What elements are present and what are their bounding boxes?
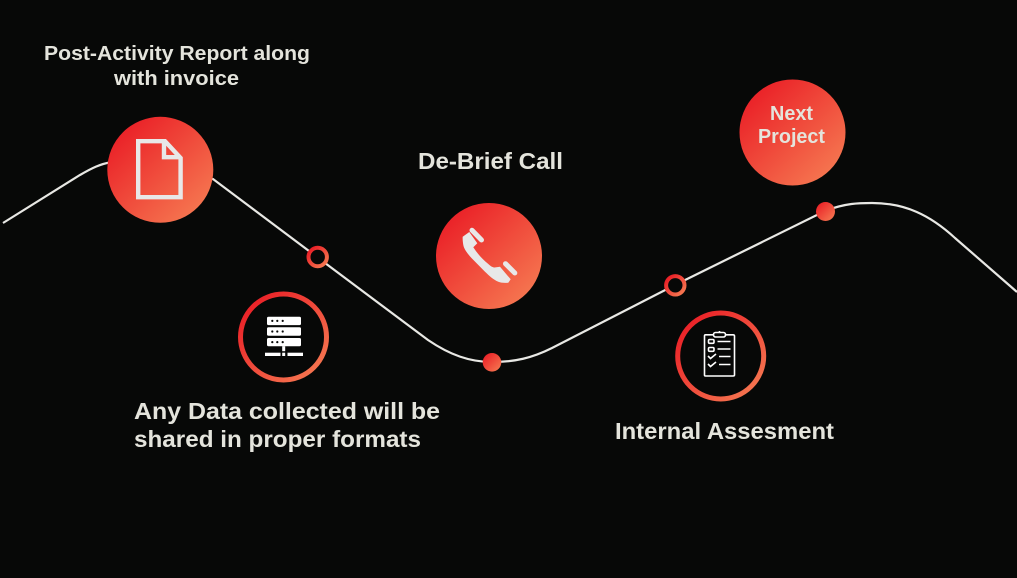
- text: data shared: Any Data collected will be: [134, 398, 440, 424]
- circle: next project: [740, 80, 846, 186]
- text: internal assessment: Internal Assesment: [615, 418, 834, 444]
- marker: solid dot one: [483, 353, 501, 372]
- heading: post-activity report: Post-Activity Report along: [44, 43, 310, 65]
- step: internal assessment: [615, 313, 834, 444]
- heading: post-activity report: with invoice: [113, 68, 239, 90]
- timeline curve: [3, 162, 1017, 362]
- step: post-activity report: [44, 43, 310, 223]
- text: data shared: shared in proper formats: [134, 426, 421, 452]
- icon ring: server: [240, 294, 326, 380]
- icon ring: clipboard: [678, 313, 764, 399]
- step: de-brief call: [418, 148, 563, 309]
- icon circle: document: [107, 117, 213, 223]
- heading: de-brief call: De-Brief Call: [418, 148, 563, 174]
- step: data shared: [134, 294, 440, 452]
- marker: hollow ring two: [666, 276, 684, 294]
- icon circle: phone: [436, 203, 542, 309]
- marker: hollow ring one: [308, 248, 327, 266]
- step: next project: [740, 80, 846, 186]
- text: next project: Project: [758, 126, 825, 148]
- marker: solid dot two: [816, 202, 835, 221]
- text: next project: Next: [770, 103, 813, 125]
